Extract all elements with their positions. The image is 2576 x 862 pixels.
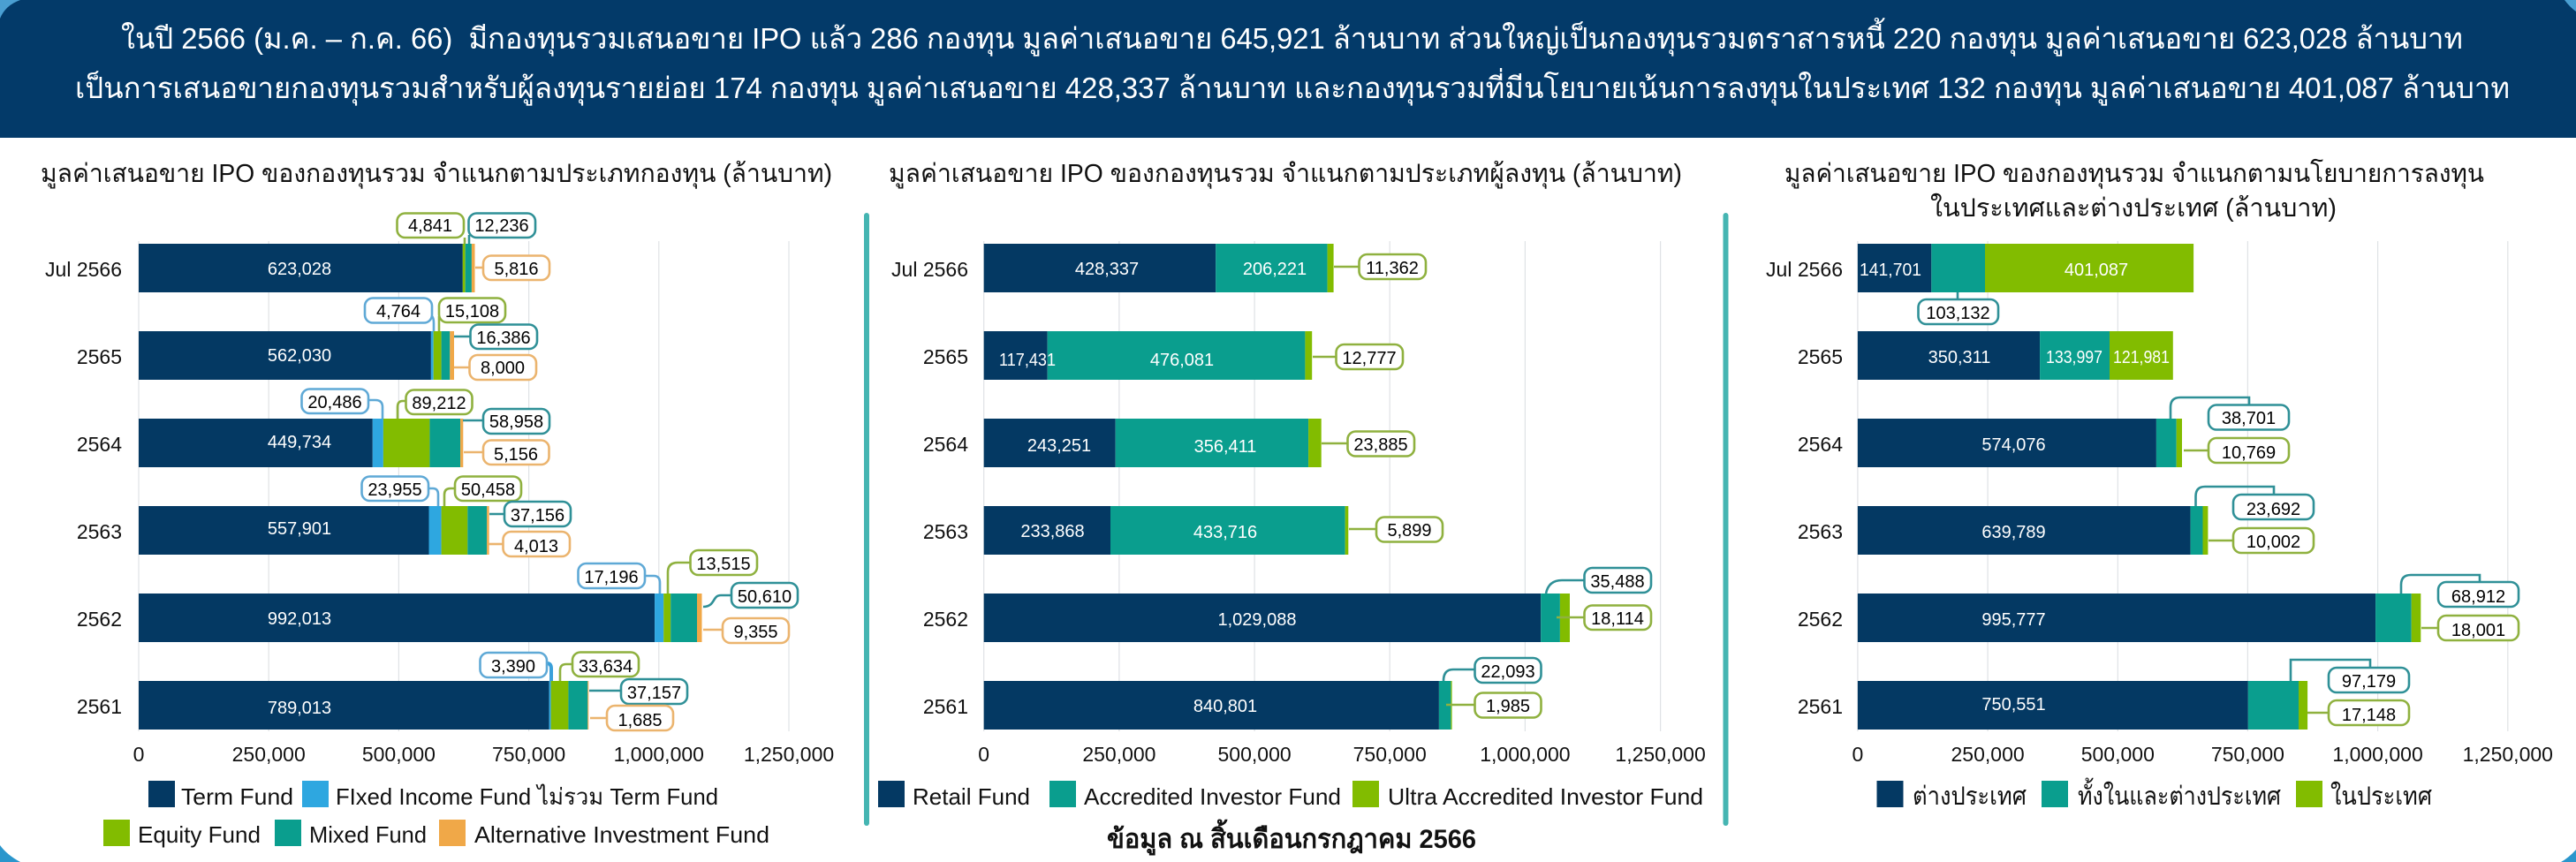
callout: 1,685	[590, 706, 673, 730]
axis labels: 1,250,000	[744, 743, 834, 766]
stacked bar: 2564: 574,076	[1981, 435, 2046, 455]
callout: 37,156: 37,156	[511, 506, 564, 526]
callout: 23,885	[1322, 431, 1414, 456]
callout: 33,634	[560, 652, 639, 681]
axis labels	[978, 743, 1706, 766]
category labels: 2563	[923, 520, 968, 543]
callout: 103,132	[1919, 292, 1998, 324]
legend: Equity Fund	[138, 821, 261, 848]
stacked bar: 2561	[984, 681, 1452, 730]
callout: 3,390	[481, 653, 551, 681]
callout: 50,458: 50,458	[461, 480, 515, 500]
header banner	[0, 0, 2576, 138]
callout: 18,001	[2421, 616, 2519, 640]
stacked bar: 2563	[984, 506, 1348, 555]
callout: 17,148: 17,148	[2342, 706, 2396, 725]
stacked bar: Jul 2566	[984, 244, 1334, 292]
chart title: มูลค่าเสนอขาย IPO ของกองทุนรวม จำแนกตามประเภทผู้ลงทุน (ล้านบาท)	[889, 160, 1682, 189]
callout: 4,764: 4,764	[376, 302, 420, 321]
stacked bar: 2565: 476,081	[1150, 351, 1214, 370]
callout: 13,515: 13,515	[696, 555, 751, 574]
axis labels: 250,000	[1951, 743, 2025, 766]
stacked bar: 2561: 750,551	[1981, 695, 2046, 715]
stacked bar: 2563	[139, 506, 489, 555]
divider right	[1723, 213, 1728, 826]
category labels: 2565	[923, 345, 968, 368]
stacked bar: Jul 2566: 428,337	[1075, 260, 1139, 279]
stacked bar: 2562: 1,029,088	[1218, 610, 1296, 630]
footer note: ข้อมูล ณ สิ้นเดือนกรกฎาคม 2566	[1107, 819, 1476, 856]
callout: 22,093: 22,093	[1481, 662, 1535, 682]
header banner: เป็นการเสนอขายกองทุนรวมสำหรับผู้ลงทุนรายย่อย 174 กองทุน มูลค่าเสนอขาย 428,337 ล้านบาท และกองทุนรวมที่มีนโยบายเน้นการลงทุนในประเทศ 132 กองทุน มูลค่าเสนอขาย 401,087 ล้านบาท	[75, 68, 2510, 106]
callout: 50,610	[703, 583, 798, 608]
corner accent: bottom right	[2561, 850, 2576, 862]
callout: 17,196: 17,196	[584, 568, 639, 587]
callout: 9,355: 9,355	[733, 623, 778, 642]
category labels: 2564	[77, 433, 122, 456]
legend: Ultra Accredited Investor Fund	[1388, 783, 1703, 810]
callout: 33,634: 33,634	[579, 657, 633, 677]
divider left	[864, 213, 869, 826]
legend: Accredited Investor Fund	[1084, 783, 1341, 810]
axis labels: 1,250,000	[1615, 743, 1706, 766]
chart title: มูลค่าเสนอขาย IPO ของกองทุนรวม จำแนกตามนโยบายการลงทุน	[1784, 158, 2484, 189]
callout: 8,000: 8,000	[481, 359, 525, 378]
callout: 5,899	[1349, 518, 1443, 542]
stacked bar: 2563: 433,716	[1193, 523, 1257, 542]
category labels: 2563	[77, 520, 122, 543]
callout: 23,955	[362, 477, 438, 506]
axis labels: 0	[133, 743, 144, 766]
callout: 5,816	[475, 256, 549, 280]
category labels: 2564	[923, 433, 968, 456]
legend: Term Fund	[181, 783, 293, 810]
category labels: 2565	[77, 345, 122, 368]
panel: by fund type	[41, 160, 834, 848]
callout: 68,912	[2401, 575, 2519, 607]
category labels: 2565	[1798, 345, 1843, 368]
axis labels: 250,000	[232, 743, 306, 766]
chart title: มูลค่าเสนอขาย IPO ของกองทุนรวม จำแนกตามประเภทกองทุน (ล้านบาท)	[41, 160, 832, 189]
legend: Alternative Investment Fund	[474, 821, 769, 848]
axis labels: 0	[1852, 743, 1863, 766]
callout: 10,002	[2209, 528, 2314, 553]
category labels: Jul 2566	[891, 258, 968, 281]
callout: 20,486	[302, 389, 383, 419]
stacked bar: 2563: 233,868	[1020, 522, 1085, 541]
category labels	[1766, 258, 1843, 718]
callout: 5,156	[464, 440, 549, 465]
stacked bar: 2564: 356,411	[1194, 437, 1256, 457]
axis labels: 250,000	[1082, 743, 1155, 766]
stacked bar: 2563	[1858, 506, 2208, 555]
axis labels: 1,000,000	[614, 743, 704, 766]
stacked bar: 2565: 133,997	[2046, 348, 2102, 367]
callout: 5,899: 5,899	[1387, 521, 1432, 541]
axis labels: 500,000	[1218, 743, 1292, 766]
legend	[103, 781, 769, 848]
callout: 23,955: 23,955	[367, 480, 422, 500]
axis labels	[133, 743, 834, 766]
callout: 35,488	[1546, 568, 1651, 594]
callout: 5,156: 5,156	[494, 445, 538, 465]
stacked bar: 2564	[139, 419, 463, 467]
callout: 38,701: 38,701	[2222, 409, 2276, 428]
legend: Mixed Fund	[309, 821, 427, 848]
axis labels: 500,000	[362, 743, 436, 766]
callout: 18,114	[1557, 606, 1651, 630]
callout: 16,386	[454, 325, 537, 349]
stacked bar: 2565: 562,030	[268, 346, 331, 366]
category labels: 2564	[1798, 433, 1843, 456]
category labels: Jul 2566	[1766, 258, 1843, 281]
callout: 12,777: 12,777	[1342, 349, 1397, 368]
callout: 4,013	[489, 532, 570, 556]
callout: 4,013: 4,013	[514, 537, 558, 556]
callout: 50,610: 50,610	[738, 587, 792, 607]
axis labels: 0	[978, 743, 989, 766]
category labels: 2562	[1798, 608, 1843, 631]
callout: 23,885: 23,885	[1353, 435, 1408, 455]
callout: 37,157: 37,157	[627, 684, 681, 703]
callout: 97,179	[2291, 660, 2409, 692]
callout: 89,212: 89,212	[412, 394, 466, 413]
callout: 11,362	[1334, 254, 1426, 279]
callout: 8,000	[454, 355, 536, 380]
callout: 16,386: 16,386	[476, 329, 531, 348]
callout: 4,841	[398, 214, 465, 244]
callout: 1,985	[1446, 692, 1541, 717]
axis labels: 750,000	[1353, 743, 1427, 766]
callout: 20,486: 20,486	[307, 393, 362, 412]
stacked bar: 2561	[139, 681, 588, 730]
callout: 37,157	[589, 679, 687, 704]
legend: ทั้งในและต่างประเทศ	[2078, 777, 2282, 811]
callout: 58,958	[463, 409, 549, 434]
callout: 13,515	[668, 550, 757, 594]
stacked bar: 2565: 350,311	[1928, 348, 1990, 367]
stacked bar: 2564	[984, 419, 1322, 467]
callout: 68,912: 68,912	[2451, 587, 2505, 607]
legend: ต่างประเทศ	[1913, 783, 2027, 811]
callout: 10,002: 10,002	[2246, 533, 2300, 552]
stacked bar: 2564: 243,251	[1027, 436, 1091, 456]
stacked bar: 2565: 121,981	[2113, 348, 2170, 367]
callout: 11,362: 11,362	[1366, 259, 1419, 278]
axis labels: 750,000	[492, 743, 565, 766]
axis labels: 500,000	[2081, 743, 2155, 766]
axis labels: 1,000,000	[2332, 743, 2423, 766]
category labels: 2561	[1798, 695, 1843, 718]
legend	[1876, 777, 2433, 811]
category labels: 2563	[1798, 520, 1843, 543]
callout: 12,236	[468, 214, 535, 244]
callout: 58,958: 58,958	[489, 412, 543, 432]
stacked bar: 2563: 557,901	[268, 519, 331, 539]
stacked bar: 2562	[984, 594, 1570, 642]
stacked bar: 2565: 117,431	[999, 351, 1056, 370]
panel: by investor type	[878, 160, 1706, 810]
corner accent: bottom left	[0, 845, 20, 862]
callout: 103,132: 103,132	[1926, 304, 1990, 323]
callout: 5,816: 5,816	[494, 260, 539, 279]
panel: by investment policy	[1766, 158, 2553, 811]
category labels	[891, 258, 968, 718]
header banner: ในปี 2566 (ม.ค. – ก.ค. 66) มีกองทุนรวมเสนอขาย IPO แล้ว 286 กองทุน มูลค่าเสนอขาย 645,921 ล้านบาท ส่วนใหญ่เป็นกองทุนรวมตราสารหนี้ 220 กองทุน มูลค่าเสนอขาย 623,028 ล้านบาท	[121, 18, 2463, 57]
category labels: 2561	[77, 695, 122, 718]
callout: 3,390: 3,390	[491, 657, 535, 677]
stacked bar: Jul 2566: 401,087	[2065, 261, 2128, 280]
callout: 97,179: 97,179	[2342, 672, 2396, 692]
callout: 1,985: 1,985	[1486, 697, 1530, 716]
axis labels: 750,000	[2211, 743, 2284, 766]
callout: 37,156	[489, 502, 571, 526]
stacked bar: 2564: 449,734	[268, 433, 331, 452]
callout: 23,692: 23,692	[2246, 500, 2300, 519]
stacked bar: 2561	[1858, 681, 2307, 730]
stacked bar: 2564	[1858, 419, 2182, 467]
callout: 4,841: 4,841	[408, 216, 452, 236]
stacked bar: 2565	[1858, 331, 2173, 380]
callout: 4,764	[365, 299, 434, 331]
callout: 17,196	[578, 563, 660, 594]
legend: Retail Fund	[913, 783, 1030, 810]
category labels: 2562	[923, 608, 968, 631]
callout: 38,701	[2171, 397, 2289, 429]
stacked bar: 2565	[139, 331, 454, 380]
callout: 12,236: 12,236	[474, 216, 529, 236]
callout: 15,108: 15,108	[445, 302, 499, 321]
stacked bar: 2565	[984, 331, 1312, 380]
callout: 23,692	[2196, 487, 2314, 519]
axis labels	[1852, 743, 2553, 766]
callout: 10,769: 10,769	[2222, 443, 2276, 463]
callout: 1,685: 1,685	[617, 711, 663, 730]
stacked bar: 2561: 840,801	[1193, 697, 1257, 716]
stacked bar: 2562: 995,777	[1981, 610, 2046, 630]
callout: 18,114: 18,114	[1591, 609, 1644, 629]
callout: 18,001: 18,001	[2451, 621, 2505, 640]
category labels: 2561	[923, 695, 968, 718]
callout: 17,148	[2307, 700, 2409, 725]
legend: ในประเทศ	[2330, 781, 2433, 811]
legend: FIxed Income Fund ไม่รวม Term Fund	[336, 783, 718, 810]
stacked bar: Jul 2566	[1858, 244, 2193, 292]
callout: 22,093	[1443, 658, 1541, 683]
stacked bar: 2562: 992,013	[268, 609, 331, 629]
stacked bar: 2562	[139, 594, 701, 642]
stacked bar: 2561: 789,013	[268, 699, 331, 718]
callout: 9,355	[703, 618, 789, 643]
stacked bar: Jul 2566: 141,701	[1860, 261, 1921, 280]
callout: 50,458	[444, 477, 521, 506]
legend	[878, 781, 1703, 810]
callout: 35,488: 35,488	[1590, 572, 1645, 592]
callout: 10,769	[2184, 438, 2289, 463]
stacked bar: Jul 2566	[139, 244, 475, 292]
stacked bar: 2563: 639,789	[1981, 523, 2046, 542]
axis labels: 1,000,000	[1480, 743, 1571, 766]
callout: 12,777	[1313, 344, 1403, 369]
category labels: 2562	[77, 608, 122, 631]
axis labels: 1,250,000	[2463, 743, 2553, 766]
callout: 89,212	[398, 390, 472, 419]
chart title line 2: ในประเทศและต่างประเทศ (ล้านบาท)	[1930, 193, 2337, 223]
callout: 15,108	[439, 299, 505, 331]
stacked bar: 2562	[1858, 594, 2421, 642]
category labels	[45, 258, 122, 718]
stacked bar: Jul 2566: 623,028	[268, 260, 331, 279]
stacked bar: Jul 2566: 206,221	[1243, 260, 1307, 279]
category labels: Jul 2566	[45, 258, 122, 281]
